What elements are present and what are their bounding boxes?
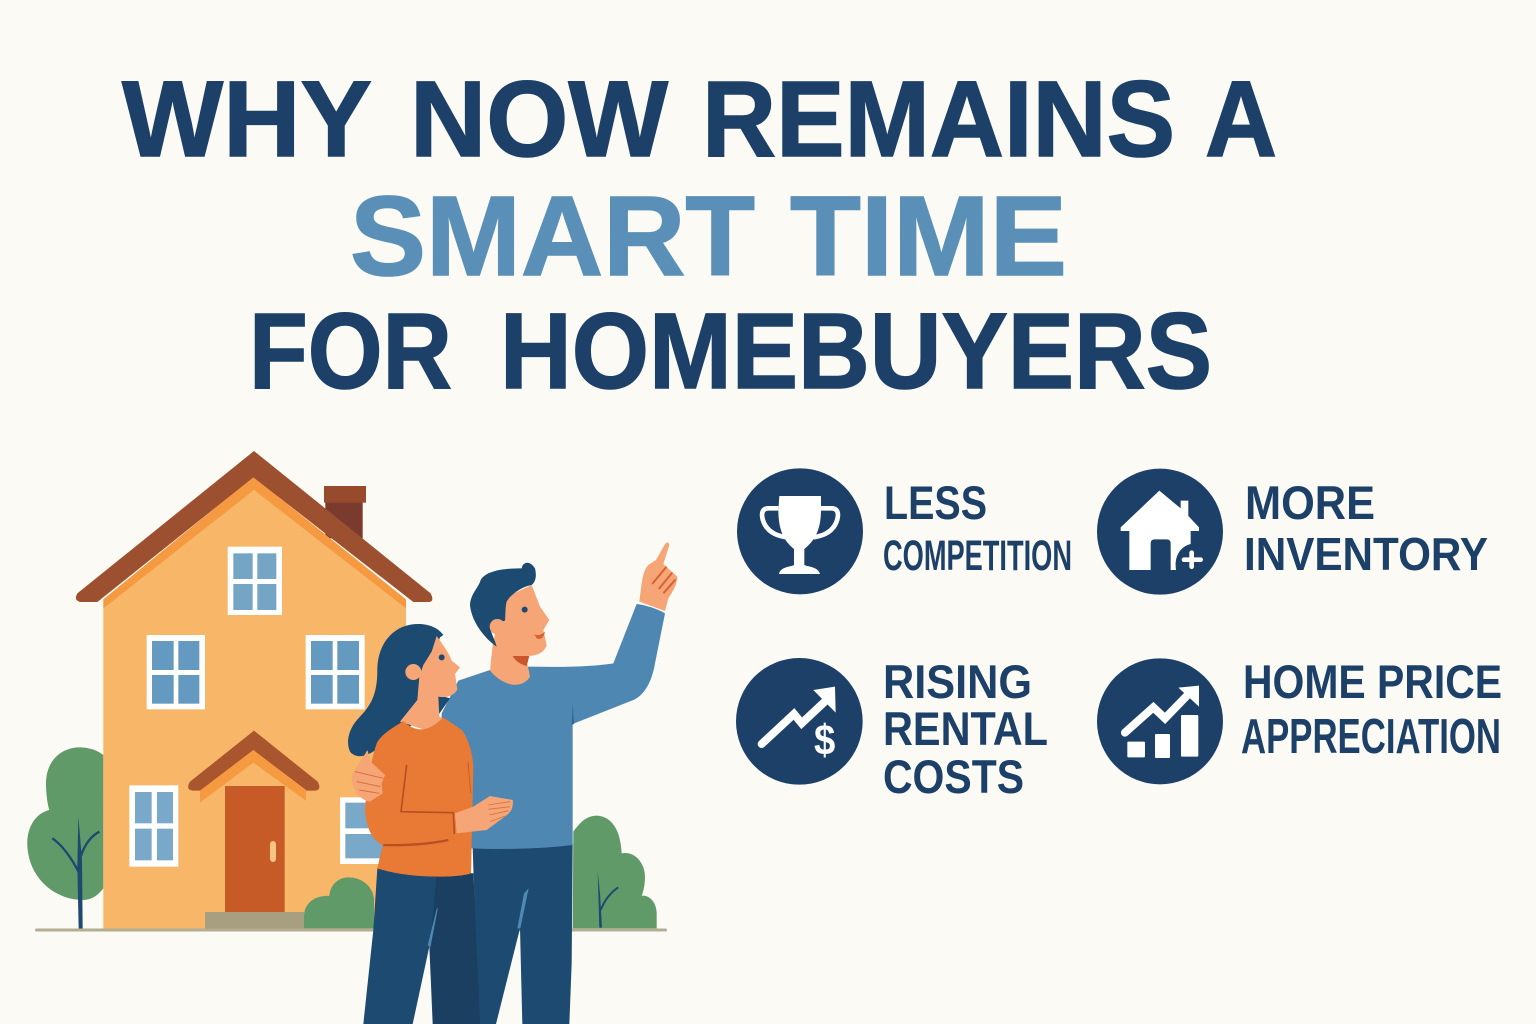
label line 2: RENTAL: [883, 702, 1048, 755]
label line 2: INVENTORY: [1244, 528, 1488, 580]
woman trousers: [363, 868, 480, 1024]
man hand on shoulder: [352, 750, 385, 802]
chimney: [324, 486, 366, 538]
woman face and neck: [400, 636, 460, 732]
woman sweater: [365, 717, 473, 877]
woman hair: [348, 624, 450, 756]
label: rising rental costs: [883, 655, 1048, 803]
bush near door: [304, 877, 374, 928]
title line 3: FOR: [249, 290, 452, 411]
title line 1: [122, 58, 1277, 179]
lower left window: [129, 785, 178, 867]
lower right window: [340, 797, 383, 864]
label line 1: LESS: [884, 476, 987, 529]
label line 1: RISING: [883, 655, 1032, 708]
illustration: house with trees: [27, 451, 432, 929]
porch roof: [188, 731, 319, 803]
label line 1: MORE: [1245, 476, 1375, 529]
left tree: [27, 747, 103, 929]
ground line: [35, 928, 667, 932]
label: more inventory: [1244, 476, 1488, 580]
front door: [225, 786, 285, 912]
title line 1: A: [1205, 58, 1277, 179]
top window: [228, 547, 282, 615]
roof: [76, 451, 432, 602]
roof fascia: [103, 477, 406, 608]
man sweater: [440, 604, 665, 849]
label line 1: HOME PRICE: [1243, 655, 1502, 708]
title line 2 highlight: SMART: [350, 173, 755, 299]
icon: rising arrow with dollar: $: [814, 717, 836, 765]
icon: trophy: [737, 468, 863, 594]
man trousers: [473, 843, 573, 1024]
title line 1: NOW: [410, 58, 668, 179]
illustration: right bush: [573, 816, 657, 928]
title line 2 highlight: [350, 173, 1067, 299]
title line 3: HOMEBUYERS: [500, 290, 1212, 411]
man: [440, 543, 677, 1024]
man raised hand: [639, 543, 677, 611]
woman hand on sleeve: [455, 796, 513, 833]
label: home price appreciation: [1241, 655, 1502, 764]
icon: rising arrow with dollar: [736, 658, 863, 785]
label line 3: COSTS: [883, 750, 1024, 803]
man hair: [470, 563, 536, 647]
middle right window: [306, 635, 365, 709]
front step: [205, 912, 304, 929]
icon: house with plus: [1097, 469, 1223, 595]
man head and neck: [490, 585, 549, 685]
house walls: [103, 490, 406, 929]
title line 2 highlight: TIME: [790, 173, 1067, 299]
middle left window: [147, 635, 205, 709]
title line 1: WHY: [122, 58, 372, 179]
icon: rising chart bars: [1097, 658, 1223, 784]
illustration: couple: [348, 543, 677, 1024]
label: less competition: [883, 476, 1072, 580]
title line 3: [249, 290, 1212, 411]
woman: [348, 624, 513, 1024]
title line 1: REMAINS: [702, 58, 1175, 179]
title: [122, 58, 1277, 411]
label line 2: COMPETITION: [883, 532, 1072, 580]
